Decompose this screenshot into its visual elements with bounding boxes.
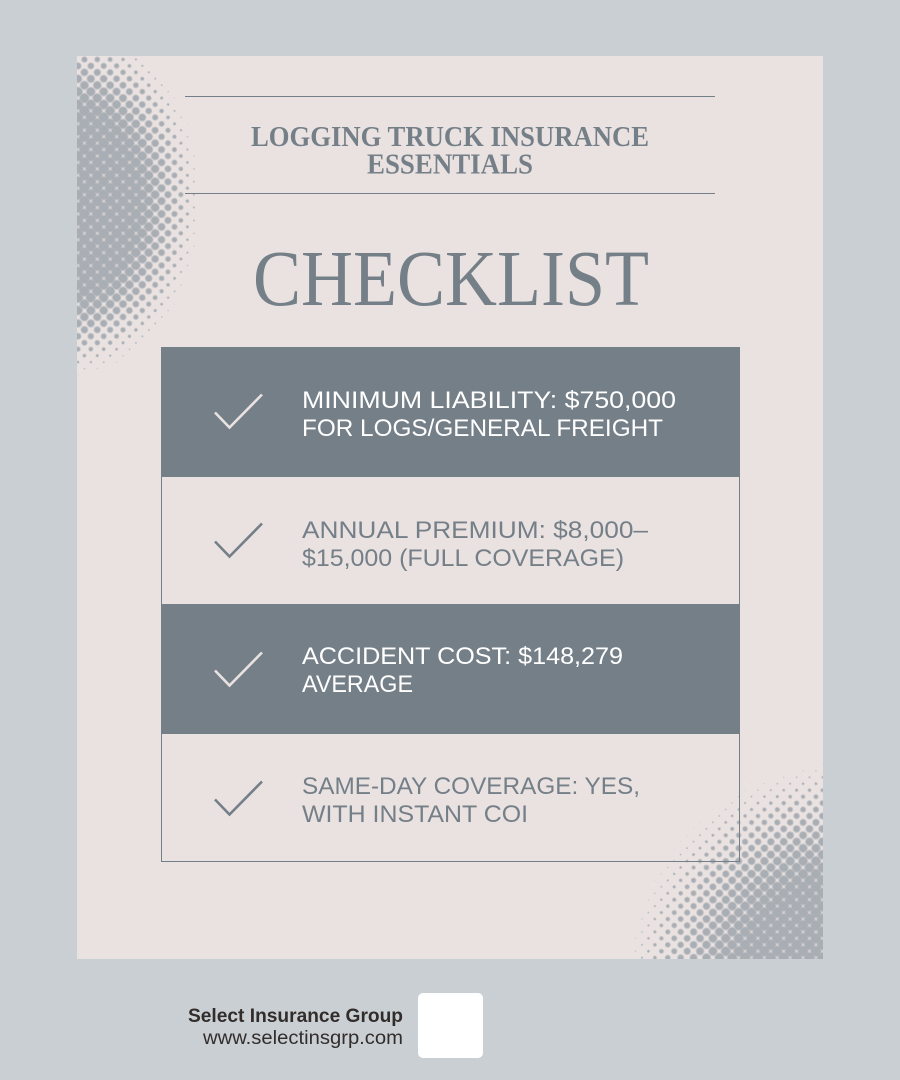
text: minimum liability: MINIMUM LIABILITY: $750,000 [302,387,676,414]
heading: logging truck insurance essentials [251,121,649,180]
text: annual premium: ANNUAL PREMIUM: $8,000– [302,517,648,544]
footer: company details: Select Insurance Group [188,1006,403,1027]
text: accident cost: AVERAGE [302,671,413,698]
icon: check mark [215,524,262,556]
icon: check mark [215,652,262,686]
text: minimum liability: FOR LOGS/GENERAL FREIGHT [302,415,663,442]
text: same-day coverage [302,773,640,828]
text: accident cost [302,643,623,698]
title: checklist: CHECKLIST [253,236,649,323]
text: accident cost: ACCIDENT COST: $148,279 [302,643,623,670]
heading: logging truck insurance essentials: ESSENTIALS [367,148,533,180]
footer: company details: www.selectinsgrp.com [202,1028,403,1049]
heading: logging truck insurance essentials: LOGGING TRUCK INSURANCE [251,121,649,153]
row 1: minimum liability [161,347,740,477]
text: same-day coverage: SAME-DAY COVERAGE: YES, [302,773,640,800]
text: minimum liability [302,387,676,442]
text: same-day coverage: WITH INSTANT COI [302,801,528,828]
checklist frame [162,348,740,862]
halftone blob: bottom right [630,760,823,959]
text: annual premium: $15,000 (FULL COVERAGE) [302,545,624,572]
panel: checklist card [77,56,823,959]
logo placeholder [418,993,483,1058]
row 4: same-day coverage [215,773,640,828]
icon: check mark [215,394,262,428]
text: annual premium [302,517,648,572]
icon: check mark [215,782,262,814]
halftone blob: top left [77,56,200,378]
header block [185,96,715,194]
row 2: annual premium [215,517,648,572]
footer: company details [188,1006,403,1049]
row 3: accident cost [161,604,740,734]
